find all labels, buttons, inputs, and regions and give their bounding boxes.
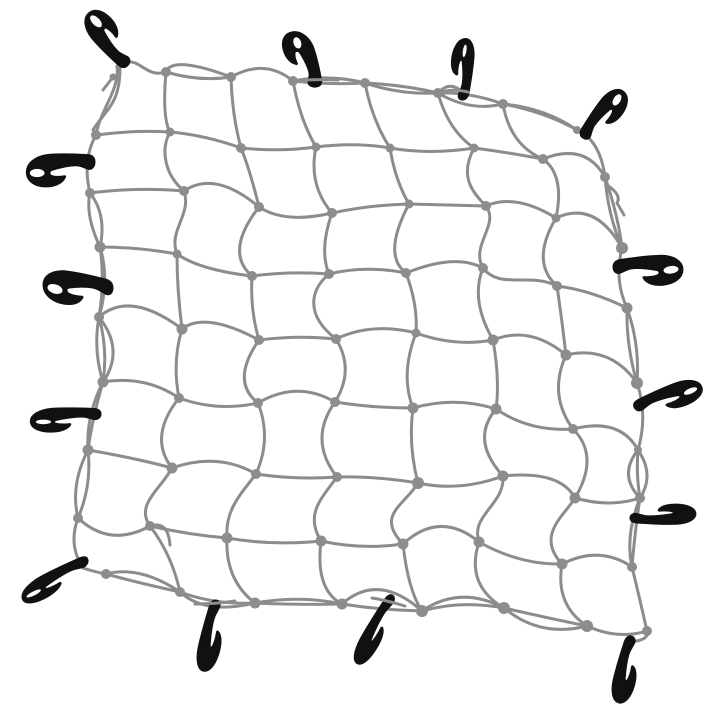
hook: right 3 xyxy=(631,504,695,524)
hook: right 1 xyxy=(614,254,682,289)
horizontal cords xyxy=(78,62,647,635)
hook: top left xyxy=(79,6,141,69)
hook: bottom 2 xyxy=(349,594,404,666)
hook: left 2 xyxy=(44,267,112,313)
hook: left 1 xyxy=(27,155,94,186)
hook: bottom right xyxy=(608,636,647,704)
hook: left 3 xyxy=(31,409,100,431)
knots xyxy=(73,67,652,636)
hook: bottom left xyxy=(21,555,90,607)
cargo net cords and knots xyxy=(73,62,652,642)
hook: right 2 xyxy=(633,375,705,423)
vertical cords xyxy=(74,66,647,642)
hook: top 3 xyxy=(447,38,476,102)
hook: bottom 1 xyxy=(193,601,232,671)
cords passing over hooks xyxy=(195,80,468,606)
hook: top right xyxy=(579,84,631,149)
hook: top 2 xyxy=(280,31,323,89)
